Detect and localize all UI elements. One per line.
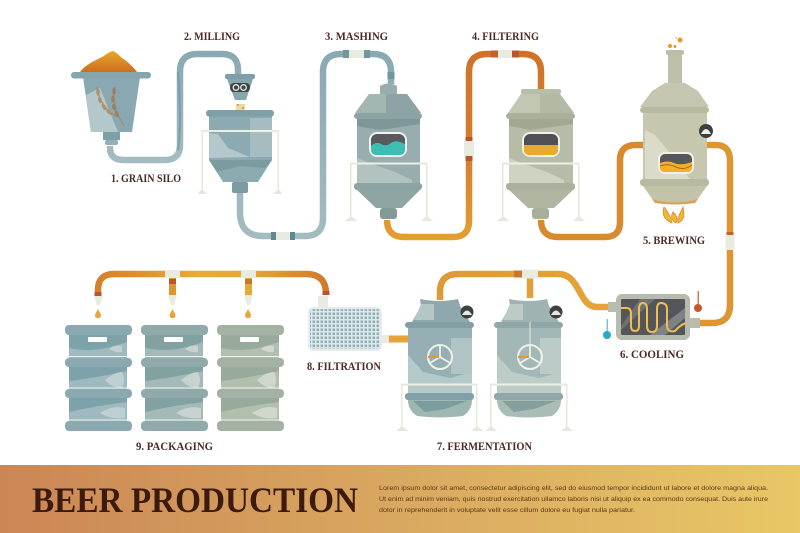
window (370, 133, 406, 156)
label: filtration: 8. FILTRATION (307, 359, 381, 373)
body text (379, 485, 768, 514)
label: packaging: 9. PACKAGING (136, 439, 213, 453)
body text: dolor in reprehenderit in voluptate velit esse cillum dolore eu fugiat nulla pariatur. (379, 507, 635, 514)
label: fermentation: 7. FERMENTATION (437, 439, 532, 453)
stand (396, 384, 483, 431)
stand (486, 384, 573, 431)
pipe: cooling to fermentation (440, 270, 609, 307)
icon: mill (225, 74, 255, 110)
bubbles (668, 37, 682, 48)
body text: Ut enim ad minim veniam, quis nostrud exercitation ullamco laboris nisi ut aliquip ex ea commodo consequat. Duis aute irure (379, 496, 768, 503)
nozzles and drops (94, 295, 253, 318)
tank: filtering (497, 89, 585, 221)
wheel (428, 345, 452, 369)
tank: brewing (640, 37, 713, 223)
gauge (699, 124, 713, 138)
stand: silo 2 (197, 130, 283, 194)
tank: mill silo (206, 110, 274, 193)
pipe: mashing to filtering (387, 50, 541, 237)
fermentation tank 1 (396, 299, 483, 431)
stand (345, 162, 433, 221)
footer band (0, 465, 800, 533)
stand (497, 162, 585, 221)
filter (308, 296, 408, 351)
label: grain silo: 1. GRAIN SILO (111, 171, 181, 185)
pipe: filtration to kegs (94, 270, 330, 296)
keg 3 (217, 325, 284, 431)
label: mashing: 3. MASHING (325, 29, 388, 43)
window (523, 133, 559, 156)
pipe: brewing to cooling (698, 145, 734, 323)
label: cooling: 6. COOLING (620, 347, 684, 361)
gauge (550, 306, 562, 318)
body text: Lorem ipsum dolor sit amet, consectetur adipiscing elit, sed do eiusmod tempor incididunt ut labore et dolore magna aliqua. (379, 485, 768, 492)
tank: mashing (345, 84, 433, 221)
pipe: silo to mill (110, 54, 238, 160)
keg 2 (141, 325, 208, 431)
window (659, 153, 693, 173)
thermometer cold (603, 319, 611, 339)
wheel (518, 345, 542, 369)
pipe: filtering to brewing (541, 145, 644, 237)
icon: grain silo (71, 51, 151, 145)
icon: flames (663, 207, 684, 223)
pipe: silo 2 to mashing (240, 50, 394, 240)
coil (621, 303, 686, 332)
label: filtering: 4. FILTERING (472, 29, 539, 43)
title: BEER PRODUCTION (32, 480, 358, 520)
thermometer hot (694, 291, 702, 312)
fermentation tank 2 (486, 299, 573, 431)
gauge (460, 306, 474, 318)
icon: wheat (96, 87, 124, 126)
cooler (603, 291, 702, 340)
label: milling: 2. MILLING (184, 29, 240, 43)
keg 1 (65, 325, 132, 431)
label: brewing: 5. BREWING (643, 233, 705, 247)
